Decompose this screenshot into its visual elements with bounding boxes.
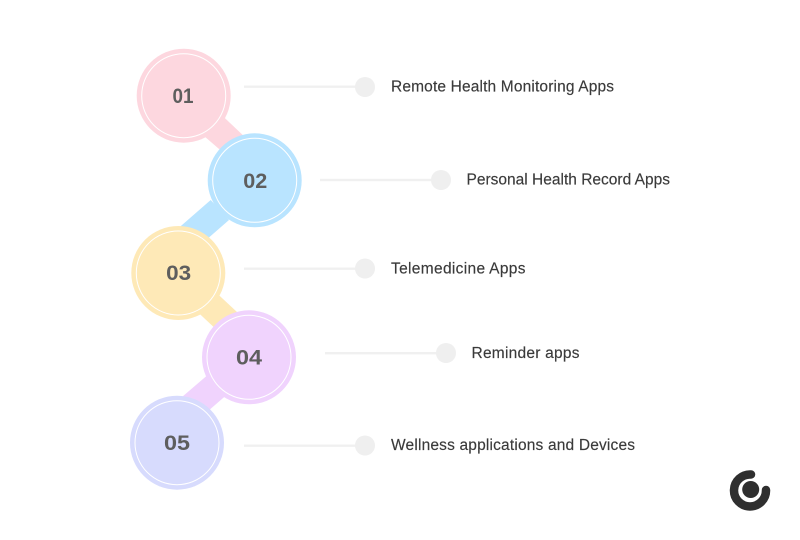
leader line and dot 02	[320, 170, 451, 190]
label 04: Reminder apps	[472, 345, 580, 362]
step 03 badge	[131, 226, 225, 320]
step 01 badge	[137, 49, 231, 143]
step 02 badge	[208, 133, 302, 227]
connector band: 03 to 04 yellow	[195, 292, 245, 333]
label 02: Personal Health Record Apps	[466, 172, 670, 188]
label 03: Telemedicine Apps	[391, 260, 526, 278]
label 05: Wellness applications and Devices	[391, 437, 635, 454]
connector band: 02 to 03 blue	[170, 200, 229, 254]
connector band: 04 to 05 purple	[175, 373, 230, 418]
step 03 badge: 03	[166, 262, 191, 285]
leader line and dot 03	[244, 258, 375, 278]
leader line and dot 04	[325, 343, 456, 363]
step 04 badge	[202, 310, 296, 404]
step 04 badge: 04	[236, 347, 262, 370]
step 01 badge: 01	[172, 85, 194, 108]
step 05 badge: 05	[164, 432, 190, 455]
connector band: 01 to 02 pink	[200, 114, 248, 155]
leader line and dot 05	[244, 436, 375, 456]
label 01: Remote Health Monitoring Apps	[391, 78, 614, 96]
leader line and dot 01	[244, 77, 375, 97]
logo icon	[734, 474, 766, 506]
step 05 badge	[130, 396, 224, 490]
step 02 badge: 02	[243, 170, 267, 193]
